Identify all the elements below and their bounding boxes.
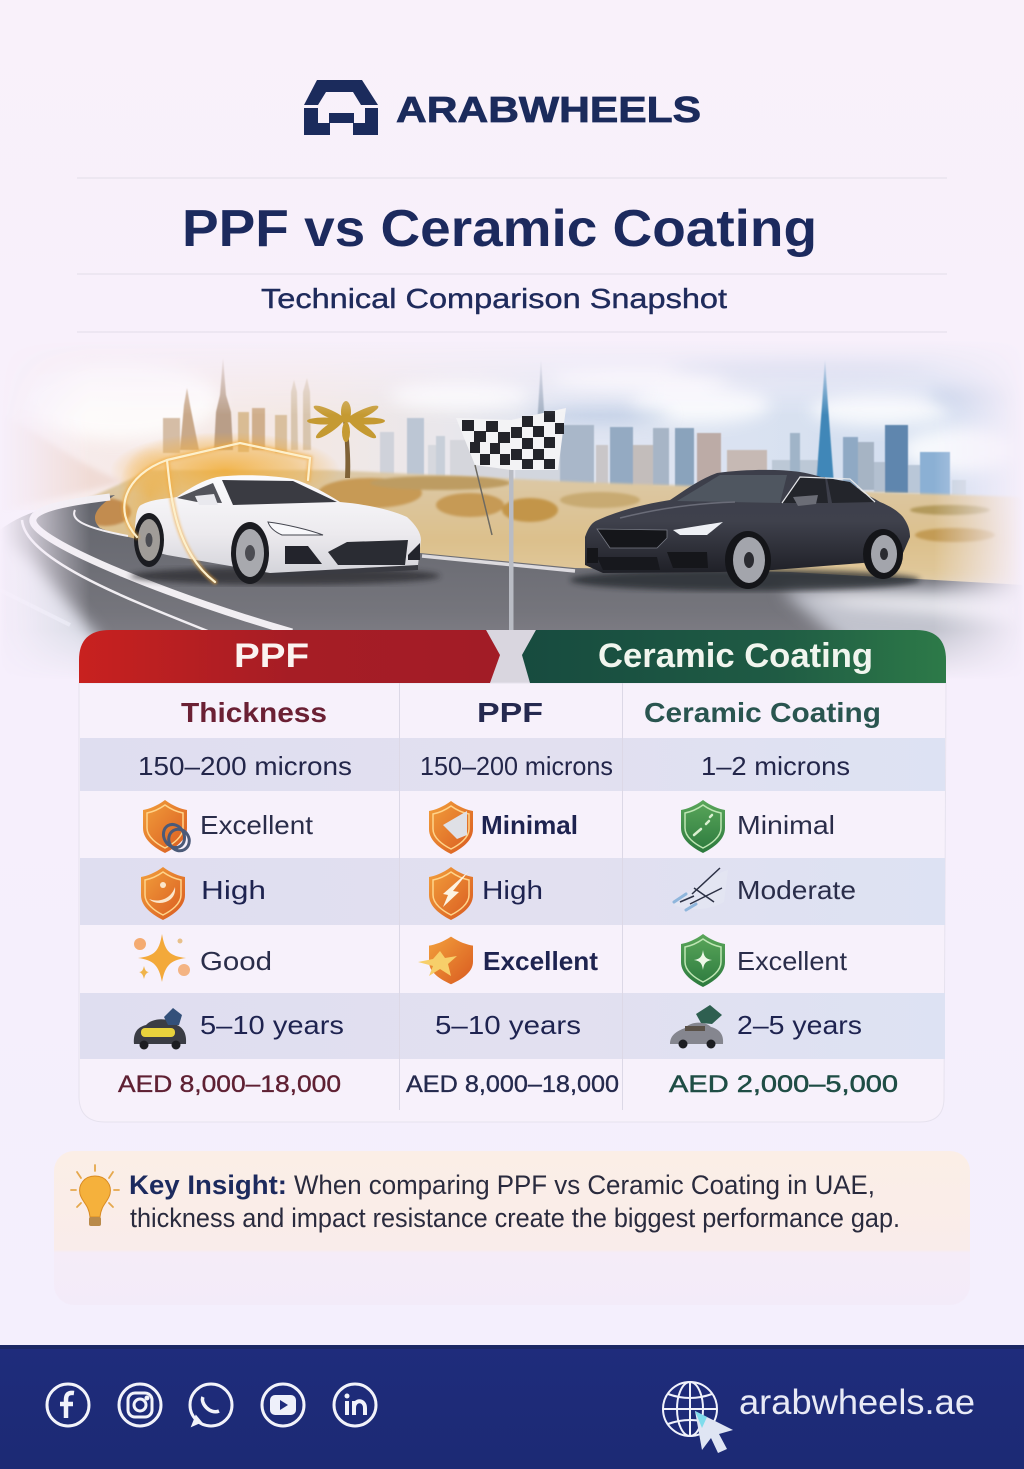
checkered flag on pole xyxy=(456,408,566,690)
icon: orange shield with blade xyxy=(429,801,473,854)
icon: orange shield with crescent xyxy=(141,867,185,920)
row: impact protection: Minimal xyxy=(737,810,835,840)
icon: golden sparkles xyxy=(134,934,190,982)
row: microns xyxy=(138,751,850,781)
black sedan xyxy=(570,470,920,591)
icon: orange shield with coil xyxy=(143,800,193,855)
callout: key insight xyxy=(54,1151,970,1305)
table header: PPF: PPF xyxy=(234,637,309,675)
social icons xyxy=(47,1384,376,1426)
icon: instagram xyxy=(119,1384,161,1426)
row: microns: 150–200 microns xyxy=(420,751,613,781)
row: lifespan: 5–10 years xyxy=(435,1010,581,1040)
logo wordmark: ARABWHEELS xyxy=(396,89,701,130)
shield outline over car xyxy=(124,443,310,582)
row: lifespan: 5–10 years xyxy=(200,1010,344,1040)
white sports car xyxy=(130,475,440,585)
pale washed road edges xyxy=(9,551,1016,674)
icon: green shield with dots xyxy=(681,800,725,853)
logo: ArabWheels xyxy=(304,80,701,135)
website address: arabwheels.ae xyxy=(739,1383,975,1422)
row: price: AED 2,000–5,000 xyxy=(669,1071,898,1098)
row: microns: 1–2 microns xyxy=(701,751,850,781)
row: column headings: Thickness xyxy=(181,697,327,728)
icon: grey car with green film roll xyxy=(670,1005,723,1048)
header gap chevron xyxy=(486,630,536,683)
icon: whatsapp xyxy=(190,1384,232,1426)
row: column headings xyxy=(181,697,881,728)
mountains at far left xyxy=(40,442,120,497)
row: scratch resistance: Moderate xyxy=(737,875,856,905)
road lane markings xyxy=(0,497,575,632)
icon: orange shield with spark xyxy=(429,867,473,920)
row: scratch resistance: High xyxy=(201,875,266,905)
palm tree xyxy=(307,401,385,478)
desert shrubs xyxy=(79,476,995,542)
row: column headings: Ceramic Coating xyxy=(644,697,881,728)
hero illustration: two cars in front of the Dubai skyline xyxy=(6,354,1018,670)
skyline: blue-grey right xyxy=(380,360,966,497)
row: price xyxy=(118,1071,898,1098)
icon: light bulb xyxy=(71,1165,119,1226)
row: column headings: PPF xyxy=(477,697,543,728)
row: gloss: Good xyxy=(200,946,272,976)
row: gloss: Excellent xyxy=(737,946,848,976)
row: impact protection: Minimal xyxy=(481,810,578,840)
road xyxy=(6,495,1014,666)
website: globe icon and cursor xyxy=(663,1382,733,1453)
row: price: AED 8,000–18,000 xyxy=(118,1071,341,1098)
table header: Ceramic Coating: Ceramic Coating xyxy=(598,637,873,675)
icon: youtube xyxy=(262,1384,304,1426)
row: impact protection xyxy=(143,800,835,855)
glowing protective shield xyxy=(114,434,336,529)
icon: linkedin xyxy=(334,1384,376,1426)
row: gloss: Excellent xyxy=(483,946,598,976)
row: lifespan: 2–5 years xyxy=(737,1010,862,1040)
sky with clouds xyxy=(46,354,1008,505)
row: scratch resistance: High xyxy=(482,875,543,905)
table body xyxy=(79,683,946,1122)
table header: Ceramic Coating xyxy=(522,630,946,683)
insight text: thickness and impact resistance create the biggest performance gap. xyxy=(130,1203,900,1233)
icon: scratch marks xyxy=(674,868,728,910)
insight text: When comparing PPF vs Ceramic Coating in UAE, xyxy=(294,1170,875,1200)
footer bar xyxy=(0,1345,1024,1469)
insight text xyxy=(129,1170,900,1233)
icon: green shield with star xyxy=(681,934,725,987)
row: price: AED 8,000–18,000 xyxy=(406,1071,619,1098)
subtitle: Technical Comparison Snapshot xyxy=(261,283,727,314)
icon: star and shield xyxy=(418,937,473,984)
skyline: warm left xyxy=(163,358,311,453)
row: microns: 150–200 microns xyxy=(138,751,352,781)
title: PPF vs Ceramic Coating xyxy=(182,200,817,258)
row: impact protection: Excellent xyxy=(200,810,314,840)
icon: yellow-lit car with film roll xyxy=(134,1008,186,1050)
comparison table panel xyxy=(79,630,946,1122)
row: lifespan xyxy=(134,1005,862,1050)
row: gloss xyxy=(134,934,848,987)
insight text: Key Insight: xyxy=(129,1170,287,1200)
icon: facebook xyxy=(47,1384,89,1426)
row: scratch resistance xyxy=(141,867,856,920)
desert ground xyxy=(91,468,1018,584)
icon: arabwheels mark xyxy=(304,80,378,135)
table header: PPF xyxy=(79,630,500,683)
